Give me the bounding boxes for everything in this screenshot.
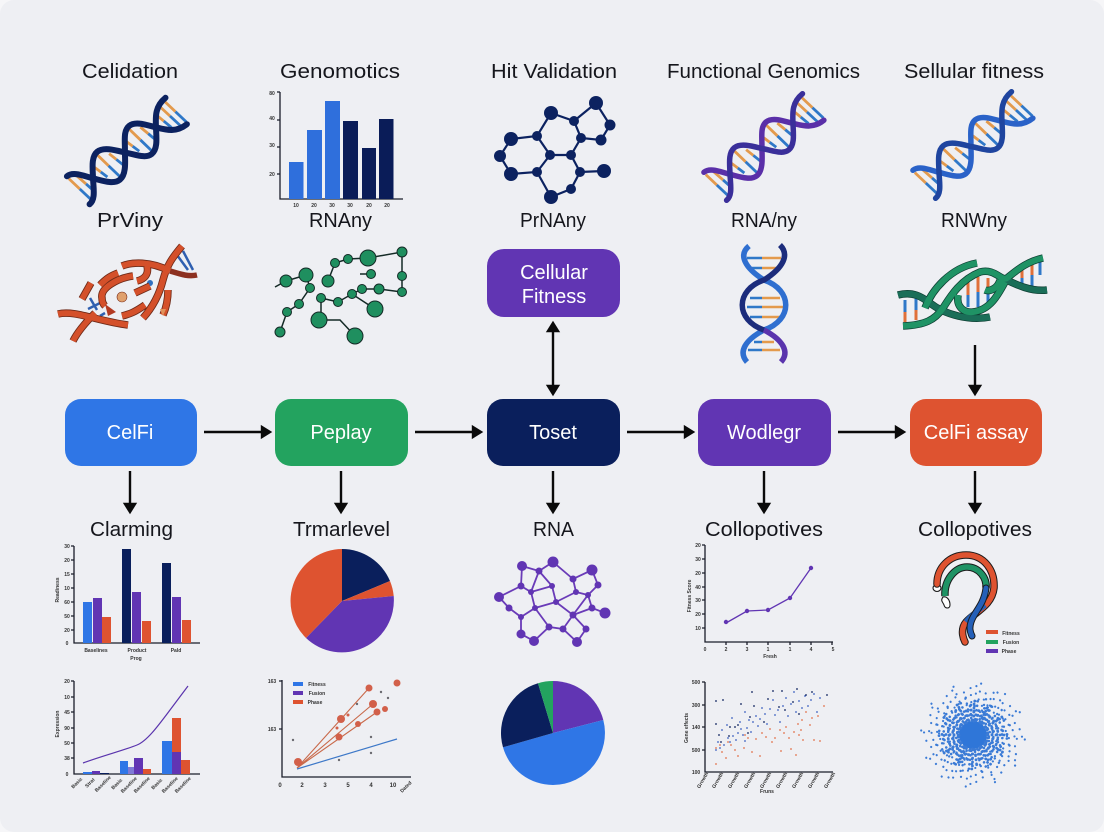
combo chart: bars with curve: Basic xyxy=(110,777,124,791)
combo chart: bars with curve: Baseline xyxy=(174,776,193,795)
line chart: Collopotives: 2 xyxy=(725,647,728,653)
scatter with trend lines: 3 xyxy=(323,783,327,789)
box: Peplay xyxy=(275,399,408,466)
box: CelFi: CelFi xyxy=(107,422,153,444)
icon: blue DNA helix xyxy=(913,90,1034,198)
combo chart: bars with curve: Basic xyxy=(70,776,84,790)
scatter with trend lines xyxy=(268,679,413,794)
box: CelFi assay xyxy=(910,399,1042,466)
scatter plot: dense points: 100 xyxy=(692,770,700,776)
scatter plot: dense points: Growth xyxy=(711,771,725,790)
box: Cellular Fitness xyxy=(487,249,620,317)
network: purple RNA xyxy=(494,556,610,647)
line chart: Collopotives: 40 xyxy=(695,585,701,591)
legend: hook colours xyxy=(986,630,1020,655)
box: Toset: Toset xyxy=(529,422,577,444)
scatter with trend lines: 163 xyxy=(268,727,276,733)
label: Collopotives column 4: Collopotives xyxy=(705,519,823,541)
grouped bar chart: Clarming: 15 xyxy=(64,572,70,578)
scatter plot: dense points: 300 xyxy=(692,703,700,709)
line chart: Collopotives: Fresh xyxy=(763,654,777,660)
icon: navy DNA helix xyxy=(67,96,188,204)
scatter with trend lines: 5 xyxy=(346,783,350,789)
arrow: Peplay down xyxy=(336,471,346,512)
label: RNAny column 2: RNAny xyxy=(309,210,372,232)
icon: green node network xyxy=(275,247,407,344)
label: RNAny column 4: RNA/ny xyxy=(731,210,797,232)
grouped bar chart: Clarming: Pald xyxy=(171,648,181,654)
bar chart: genomics: 20 xyxy=(384,203,390,209)
scatter plot: dense points: Growth xyxy=(775,771,789,790)
bar chart: genomics: 40 xyxy=(269,116,275,122)
line chart: Collopotives: 1 xyxy=(789,647,792,653)
heading: Celidation: Celidation xyxy=(82,61,178,83)
grouped bar chart: Clarming: 60 xyxy=(64,600,70,606)
icon: broken orange DNA xyxy=(58,246,197,341)
bar chart: genomics xyxy=(269,91,403,209)
label: RNWny: RNWny xyxy=(941,210,1007,232)
box: Toset xyxy=(487,399,620,466)
legend: scatter series: Fusion xyxy=(309,691,325,697)
grouped bar chart: Clarming: Product xyxy=(128,648,147,654)
label: Clarming: Clarming xyxy=(90,519,173,541)
legend: hook colours: Fitness xyxy=(1002,631,1020,637)
box: Cellular Fitness: Fitness xyxy=(522,286,586,308)
grouped bar chart: Clarming: 30 xyxy=(64,544,70,550)
label: Collopotives column 5: Collopotives xyxy=(918,519,1032,541)
legend: hook colours: Phase xyxy=(1002,649,1017,655)
scatter plot: dense points: Gene effects xyxy=(684,713,690,743)
legend: scatter series xyxy=(293,682,326,706)
combo chart: bars with curve: 0 xyxy=(66,772,69,778)
combo chart: bars with curve xyxy=(55,679,200,795)
heading: Sellular fitness: Sellular fitness xyxy=(904,61,1044,83)
scatter plot: dense points: Growth xyxy=(696,771,710,790)
arrow: assay down xyxy=(970,471,980,512)
box: Wodlegr: Wodlegr xyxy=(727,422,801,444)
scatter plot: dense points: 140 xyxy=(692,725,700,731)
arrow: Peplay to Toset xyxy=(415,427,481,437)
line chart: Collopotives: 1 xyxy=(767,647,770,653)
scatter plot: dense points: Growth xyxy=(791,771,805,790)
arrow: Wodlegr down xyxy=(759,471,769,512)
combo chart: bars with curve: 20 xyxy=(64,679,70,685)
arrow: up to Cellular Fitness, both ways xyxy=(548,323,558,394)
scatter with trend lines: 4 xyxy=(369,783,373,789)
grouped bar chart: Clarming: Baselines xyxy=(84,648,108,654)
scatter plot: dense points: 500 xyxy=(692,680,700,686)
scatter plot: dense points: Fruns xyxy=(760,789,774,795)
combo chart: bars with curve: Baseline xyxy=(120,776,139,795)
scatter plot: dense points: Growth xyxy=(743,771,757,790)
scatter with trend lines: 10 xyxy=(390,783,397,789)
grouped bar chart: Clarming: 50 xyxy=(64,614,70,620)
arrow: Toset to Wodlegr xyxy=(627,427,693,437)
grouped bar chart: Clarming: 0 xyxy=(66,641,69,647)
combo chart: bars with curve: 38 xyxy=(64,756,70,762)
icon: coiled hook with legend xyxy=(933,555,1020,655)
grouped bar chart: Clarming: 10 xyxy=(64,586,70,592)
arrow: CelFi to Peplay xyxy=(204,427,270,437)
label: PrViny: PrViny xyxy=(97,210,163,232)
bar chart: genomics: 30 xyxy=(347,203,353,209)
combo chart: bars with curve: Basic xyxy=(150,777,164,791)
scatter with trend lines: 0 xyxy=(278,783,282,789)
line chart: Collopotives: Fitness Score xyxy=(687,579,693,612)
scatter with trend lines: 163 xyxy=(268,679,276,685)
icon: molecule network navy xyxy=(494,96,616,204)
label: Trmarlevel: Trmarlevel xyxy=(293,519,390,541)
grouped bar chart: Clarming: 20 xyxy=(64,558,70,564)
combo chart: bars with curve: 50 xyxy=(64,741,70,747)
grouped bar chart: Clarming: 20 xyxy=(64,628,70,634)
scatter with trend lines: Dated xyxy=(399,780,413,794)
scatter plot: dense points xyxy=(684,680,837,795)
bar chart: genomics: 10 xyxy=(293,203,299,209)
scatter plot: dense points: Growth xyxy=(823,771,837,790)
scatter with trend lines: 2 xyxy=(300,783,304,789)
line chart: Collopotives: 4 xyxy=(810,647,813,653)
arrow: RNWny helix down to assay xyxy=(970,345,980,394)
line chart: Collopotives: 20 xyxy=(695,543,701,549)
icon: green DNA ribbon xyxy=(898,258,1047,326)
arrow: Wodlegr to assay xyxy=(838,427,904,437)
combo chart: bars with curve: Expression xyxy=(55,711,61,737)
bar chart: genomics: 20 xyxy=(311,203,317,209)
label: PrNAny: PrNAny xyxy=(520,210,586,232)
line chart: Collopotives xyxy=(687,543,835,660)
line chart: Collopotives: 5 xyxy=(832,647,835,653)
legend: hook colours: Fusion xyxy=(1003,640,1019,646)
icon: vertical DNA helix xyxy=(742,245,786,362)
pie chart: RNA xyxy=(501,681,605,785)
scatter plot: dense points: Growth xyxy=(727,771,741,790)
scatter plot: dense points: Growth xyxy=(807,771,821,790)
bar chart: genomics: 30 xyxy=(329,203,335,209)
combo chart: bars with curve: Baseline xyxy=(133,776,152,795)
combo chart: bars with curve: 45 xyxy=(64,710,70,716)
box: Cellular Fitness: Cellular xyxy=(520,262,588,284)
box: Wodlegr xyxy=(698,399,831,466)
legend: scatter series: Phase xyxy=(308,700,323,706)
combo chart: bars with curve: Baseline xyxy=(94,775,113,794)
icon: purple DNA helix xyxy=(704,92,825,200)
combo chart: bars with curve: Strat xyxy=(84,777,97,789)
heading: Hit Validation: Hit Validation xyxy=(491,61,617,83)
box: CelFi xyxy=(65,399,197,466)
bar chart: genomics: 20 xyxy=(269,172,275,178)
line chart: Collopotives: 30 xyxy=(695,557,701,563)
pie chart: Trmarlevel xyxy=(291,549,394,652)
line chart: Collopotives: 20 xyxy=(695,612,701,618)
scatter plot: dense points: Growth xyxy=(759,771,773,790)
bar chart: genomics: 30 xyxy=(269,143,275,149)
arrow: CelFi down xyxy=(125,471,135,512)
label: RNA: RNA xyxy=(533,519,575,541)
line chart: Collopotives: 0 xyxy=(704,647,707,653)
legend: scatter series: Fitness xyxy=(308,682,326,688)
line chart: Collopotives: 10 xyxy=(695,626,701,632)
box: Peplay: Peplay xyxy=(310,422,372,444)
scatter plot: dense points: 500 xyxy=(692,748,700,754)
combo chart: bars with curve: 10 xyxy=(64,695,70,701)
bar chart: genomics: 20 xyxy=(366,203,372,209)
grouped bar chart: Clarming xyxy=(55,544,200,662)
bar chart: genomics: 80 xyxy=(269,91,275,97)
heading: Functional Genomics: Functional Genomics xyxy=(667,61,860,83)
box: CelFi assay: CelFi assay xyxy=(924,422,1028,444)
grouped bar chart: Clarming: Prog xyxy=(130,656,142,662)
line chart: Collopotives: 20 xyxy=(695,571,701,577)
grouped bar chart: Clarming: Readiness xyxy=(55,577,61,603)
heading: Genomotics: Genomotics xyxy=(280,61,400,83)
line chart: Collopotives: 30 xyxy=(695,598,701,604)
line chart: Collopotives: 3 xyxy=(746,647,749,653)
radial dot cluster xyxy=(912,674,1034,796)
arrow: Toset down xyxy=(548,471,558,512)
combo chart: bars with curve: 90 xyxy=(64,726,70,732)
combo chart: bars with curve: Baseline xyxy=(161,776,180,795)
